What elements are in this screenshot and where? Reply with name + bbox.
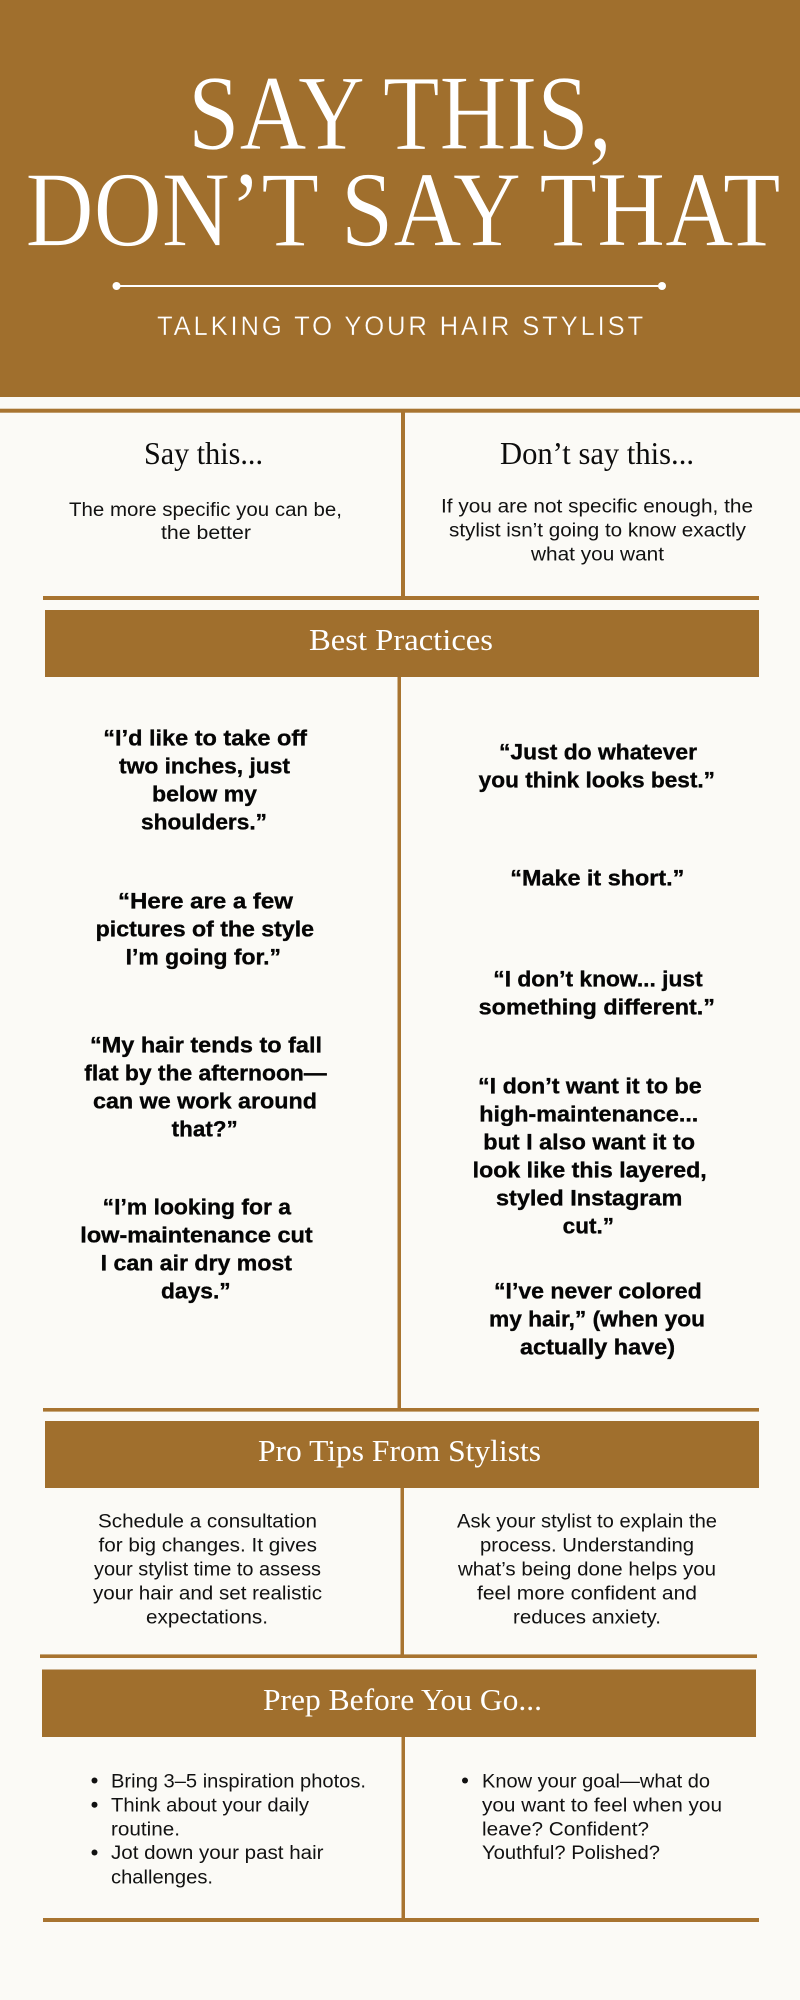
heading band: pro tips: Pro Tips From Stylists (258, 1433, 541, 1468)
heading band: best practices (45, 610, 759, 677)
title (26, 55, 780, 270)
quote: pictures of the style: I’m going for.” (126, 945, 281, 970)
quote: take off two inches: below my (152, 782, 258, 807)
heading band: prep: Prep Before You Go... (263, 1682, 542, 1717)
quote: never colored my hair: actually have) (520, 1335, 675, 1360)
quote: high-maintenance layered cut (473, 1074, 707, 1239)
text: say this intro: The more specific you can be, (69, 500, 342, 521)
quote: low-maintenance cut: days.” (161, 1279, 231, 1304)
quote: pictures of the style (96, 889, 314, 970)
quote: high-maintenance layered cut: high-maintenance... (479, 1102, 698, 1127)
list: right prep bullet: Know your goal—what do (482, 1772, 710, 1793)
text: schedule a consultation: your hair and set realistic (93, 1584, 322, 1604)
quote: high-maintenance layered cut: “I don’t want it to be (478, 1074, 702, 1099)
quote: low-maintenance cut: I can air dry most (101, 1251, 293, 1276)
quote: high-maintenance layered cut: cut.” (563, 1214, 614, 1239)
quote: just do whatever: you think looks best.” (479, 767, 715, 792)
heading band: best practices: Best Practices (309, 622, 493, 657)
quote: something different (479, 967, 715, 1020)
title: SAY THIS, (188, 55, 612, 173)
text: schedule a consultation: for big changes. It gives (98, 1536, 317, 1557)
quote: take off two inches: shoulders.” (141, 810, 267, 835)
list: left prep bullets: challenges. (111, 1867, 213, 1888)
quote: hair falls flat: flat by the afternoon— (84, 1061, 327, 1086)
subtitle: TALKING TO YOUR HAIR STYLIST (157, 311, 646, 341)
quote: low-maintenance cut: “I’m looking for a (103, 1195, 292, 1220)
list: left prep bullets: Bring 3–5 inspiration photos. (111, 1772, 366, 1793)
quote: hair falls flat: that?” (172, 1117, 238, 1142)
quote: take off two inches (103, 726, 308, 835)
quote: never colored my hair: “I’ve never colored (494, 1279, 702, 1304)
text: ask your stylist: process. Understanding (480, 1536, 694, 1557)
list: right prep bullet: you want to feel when you (482, 1795, 722, 1816)
quote: pictures of the style: “Here are a few (118, 889, 294, 914)
quote: make it short: “Make it short.” (510, 866, 684, 891)
list: left prep bullets: Jot down your past hair (111, 1843, 324, 1864)
quote: hair falls flat: “My hair tends to fall (90, 1033, 322, 1058)
quote: high-maintenance layered cut: styled Instagram (496, 1186, 682, 1211)
text: don't say this intro: what you want (530, 545, 665, 566)
panel: say this / don't say this (0, 409, 800, 600)
text: schedule a consultation: your stylist time to assess (94, 1560, 321, 1581)
title banner (0, 0, 800, 397)
quote: low-maintenance cut (80, 1195, 313, 1304)
text: don't say this intro (441, 496, 753, 566)
text: ask your stylist: reduces anxiety. (513, 1608, 661, 1629)
panel: prep before you go (42, 1670, 759, 1922)
quote: pictures of the style: pictures of the style (96, 917, 314, 942)
quote: high-maintenance layered cut: look like this layered, (473, 1158, 707, 1183)
list: left prep bullets: routine. (111, 1820, 180, 1840)
text: ask your stylist: Ask your stylist to explain the (457, 1512, 717, 1532)
panel: best practices (43, 610, 759, 1412)
heading band: pro tips (45, 1421, 759, 1488)
text: say this intro: the better (161, 523, 252, 544)
quote: never colored my hair (489, 1279, 705, 1360)
heading: say this: Say this... (144, 435, 263, 471)
list: right prep bullet: leave? Confident? (482, 1820, 649, 1840)
quote: hair falls flat: can we work around (93, 1089, 317, 1114)
quote: just do whatever: “Just do whatever (499, 739, 697, 764)
quote: never colored my hair: my hair,” (when you (489, 1307, 705, 1332)
text: schedule a consultation: Schedule a consultation (98, 1512, 317, 1532)
text: ask your stylist: what’s being done helps you (457, 1560, 716, 1581)
quote: hair falls flat (84, 1033, 327, 1142)
list: left prep bullets: Think about your daily (111, 1795, 310, 1816)
text: schedule a consultation: expectations. (146, 1608, 268, 1629)
text: say this intro (69, 500, 342, 544)
title divider (112, 282, 666, 290)
panel: pro tips from stylists (40, 1421, 759, 1658)
text: ask your stylist: feel more confident and (477, 1584, 697, 1604)
quote: something different: “I don’t know... just (493, 967, 703, 992)
text: schedule a consultation (93, 1512, 322, 1629)
quote: high-maintenance layered cut: but I also want it to (483, 1130, 695, 1155)
quote: just do whatever (479, 739, 715, 792)
list: right prep bullet: Youthful? Polished? (482, 1843, 660, 1864)
text: don't say this intro: If you are not specific enough, the (441, 496, 753, 518)
quote: take off two inches: two inches, just (119, 754, 291, 779)
quote: something different: something different.” (479, 995, 715, 1020)
quote: low-maintenance cut: low-maintenance cut (80, 1223, 313, 1248)
list: left prep bullets (92, 1772, 366, 1888)
quote: take off two inches: “I’d like to take off (103, 726, 308, 751)
list: right prep bullet (462, 1772, 722, 1864)
text: don't say this intro: stylist isn’t going to know exactly (449, 521, 747, 542)
text: ask your stylist (457, 1512, 717, 1629)
heading band: prep (42, 1670, 756, 1737)
heading: don't say this: Don’t say this... (500, 435, 694, 471)
